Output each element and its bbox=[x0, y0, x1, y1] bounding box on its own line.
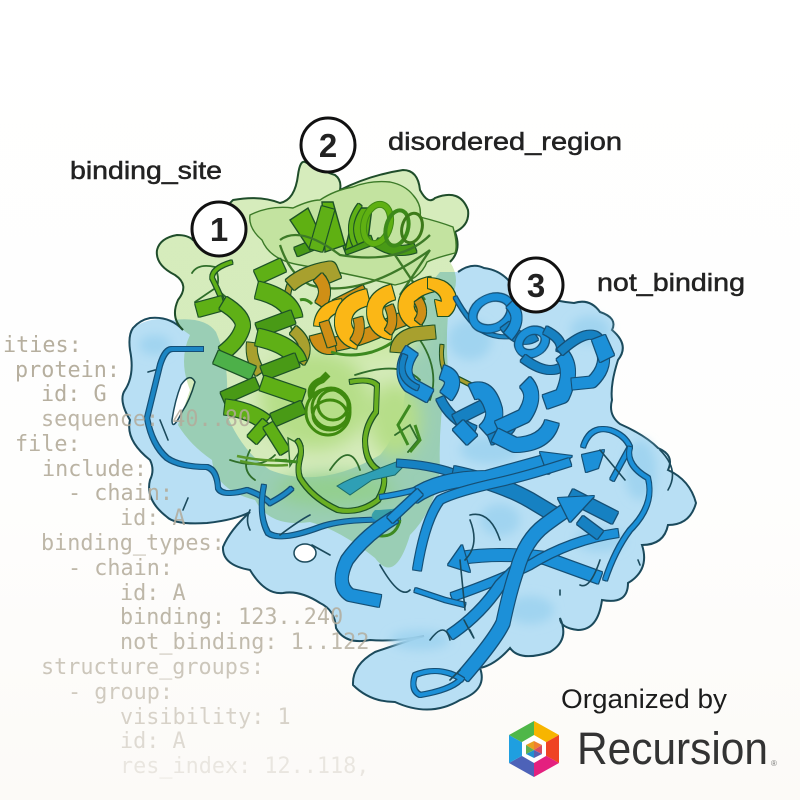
registered mark: ® bbox=[771, 759, 777, 768]
marker 2 bbox=[301, 118, 355, 172]
YAML code text: sequence: 40..80 bbox=[41, 407, 251, 432]
top helix bbox=[296, 240, 415, 252]
YAML code text bbox=[3, 333, 369, 779]
YAML code text: include: bbox=[42, 457, 147, 482]
coil helix end-on bbox=[306, 374, 350, 435]
YAML code text: - chain: bbox=[68, 556, 173, 581]
YAML code text: id: A bbox=[120, 581, 186, 606]
ribbons: blue helices bbox=[397, 291, 614, 445]
YAML code text: id: A bbox=[120, 729, 186, 754]
YAML code text: id: G bbox=[41, 382, 107, 407]
Recursion logo icon bbox=[509, 721, 559, 777]
YAML code text: - chain: bbox=[68, 481, 173, 506]
YAML code text: binding_types: bbox=[41, 531, 225, 556]
marker 3: 3 bbox=[527, 267, 545, 304]
YAML code text: ities: bbox=[3, 333, 82, 358]
YAML code text: id: A bbox=[120, 506, 186, 531]
YAML code text: binding: 123..240 bbox=[120, 605, 343, 630]
ribbons: blue beta sheets bbox=[148, 370, 672, 695]
marker 1 bbox=[192, 202, 246, 256]
YAML code text: res_index: 12..118, bbox=[120, 754, 369, 779]
YAML code text: protein: bbox=[15, 358, 120, 383]
protein surface: green domain bbox=[157, 162, 468, 567]
ribbon: thin blue coil bbox=[147, 349, 400, 536]
surface holes bbox=[172, 378, 195, 424]
marker 1: 1 bbox=[210, 211, 228, 248]
thin green loops bbox=[297, 381, 384, 511]
YAML code text: visibility: 1 bbox=[120, 705, 291, 730]
YAML code text: not_binding: 1..122 bbox=[120, 630, 369, 655]
label: disordered_region: disordered_region bbox=[388, 128, 622, 156]
ribbons: green helices bbox=[197, 201, 430, 536]
Recursion wordmark: Recursion bbox=[577, 723, 768, 774]
marker 2: 2 bbox=[319, 127, 337, 164]
YAML code text: structure_groups: bbox=[41, 655, 264, 680]
marker 3 bbox=[509, 258, 563, 312]
label: not_binding: not_binding bbox=[597, 269, 745, 297]
YAML code text: - group: bbox=[68, 680, 173, 705]
teal strand bbox=[337, 462, 404, 495]
label: binding_site: binding_site bbox=[70, 157, 222, 185]
ribbons: orange helix bbox=[290, 268, 456, 355]
inner green shell bbox=[250, 182, 456, 285]
protein surface: blue domain bbox=[122, 266, 696, 710]
organized by caption: Organized by bbox=[561, 684, 728, 714]
YAML code text: file: bbox=[15, 432, 81, 457]
